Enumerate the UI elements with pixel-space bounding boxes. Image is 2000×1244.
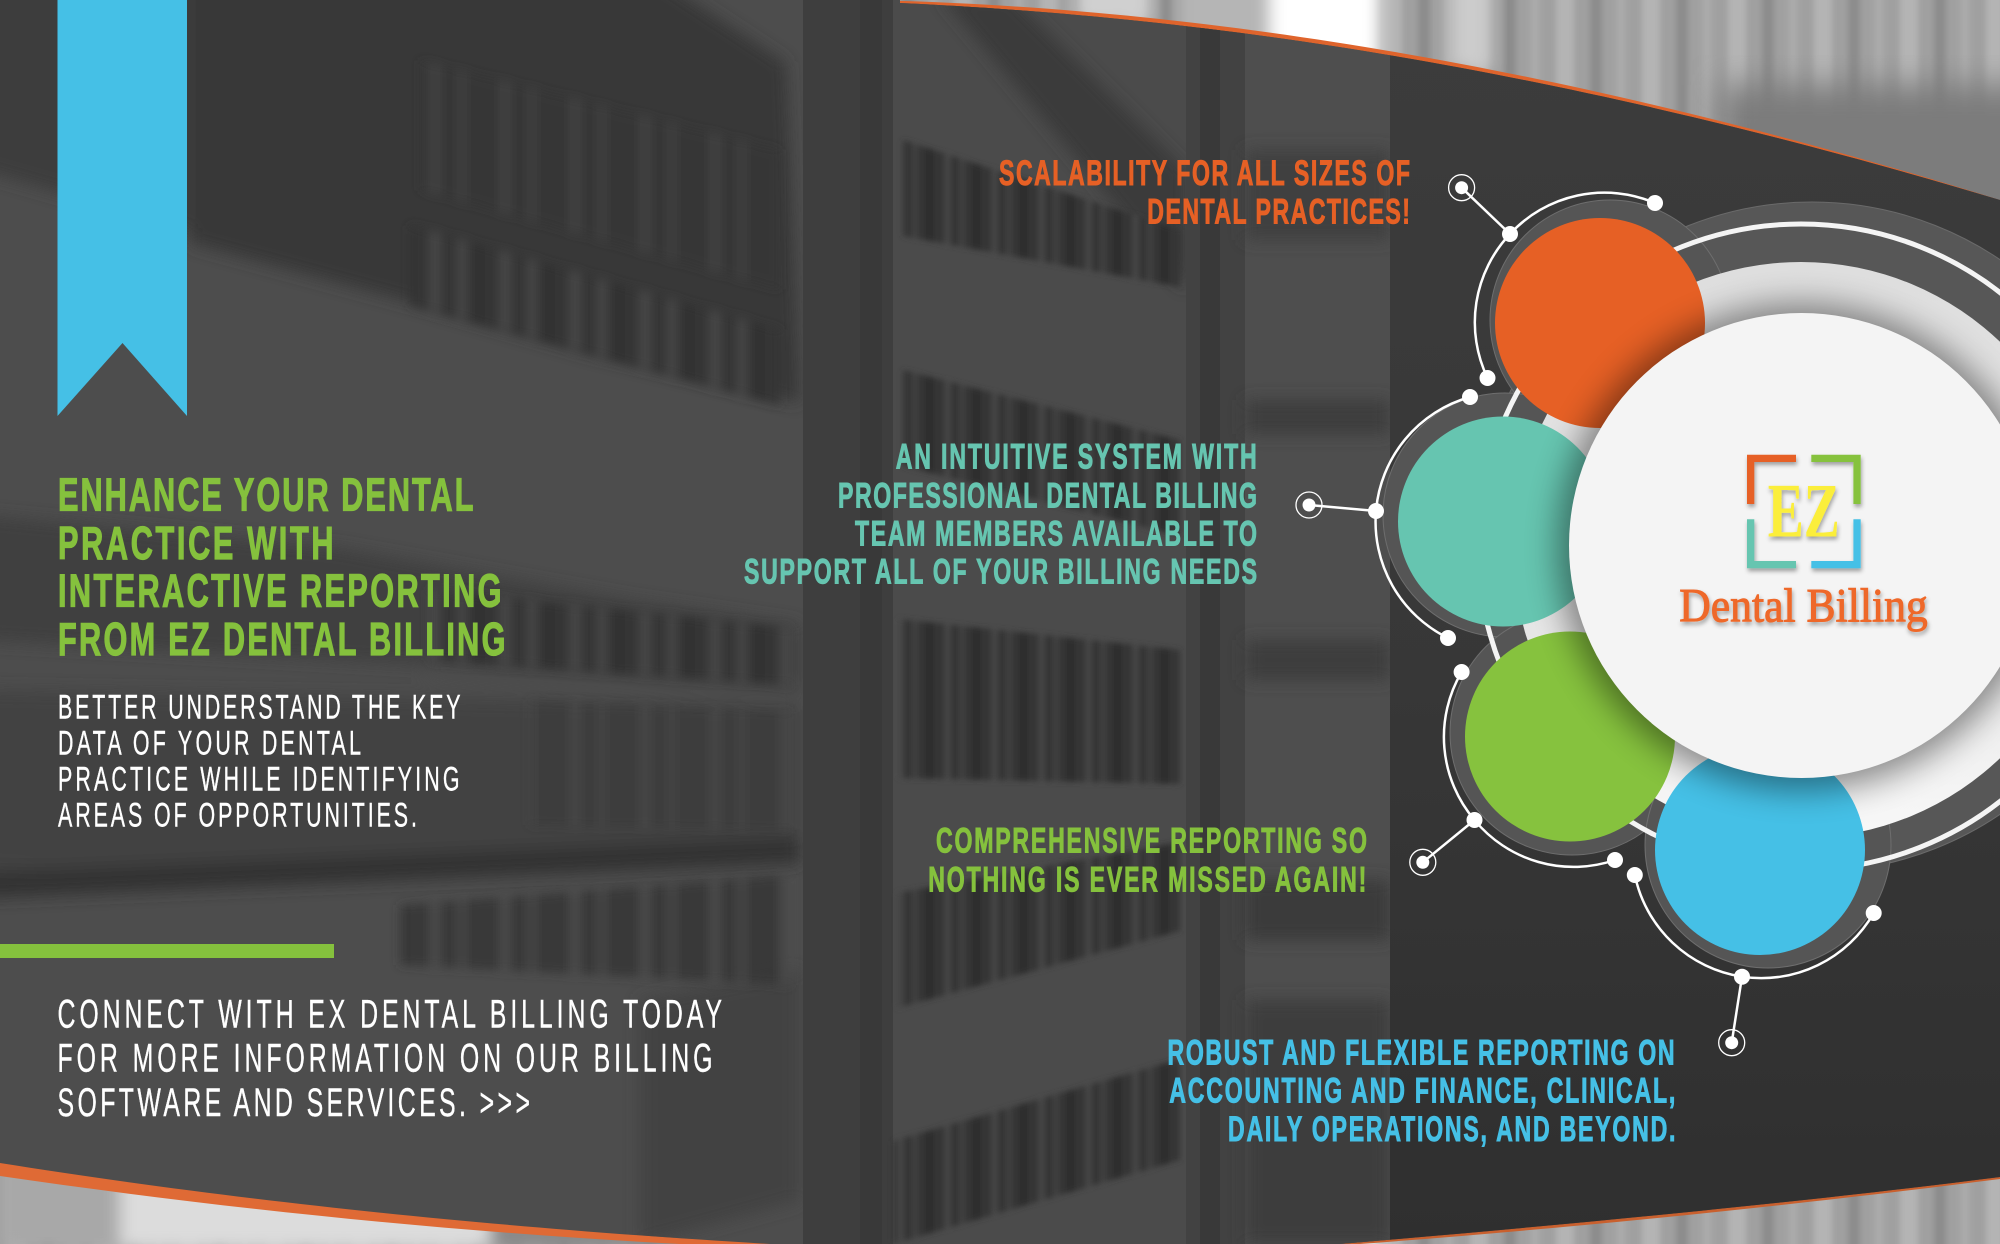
label: intuitive system: SUPPORT ALL OF YOUR BILLING NEEDS xyxy=(744,553,1257,592)
white ring line xyxy=(1478,224,2000,870)
label: intuitive system: PROFESSIONAL DENTAL BILLING xyxy=(838,477,1257,516)
background: orange bottom right sliver xyxy=(1300,1175,2000,1244)
label: robust reporting: ACCOUNTING AND FINANCE, CLINICAL, xyxy=(1169,1072,1675,1111)
background: orange top curve xyxy=(870,0,2000,204)
circle: green xyxy=(1465,632,1675,842)
intro text block: DATA OF YOUR DENTAL xyxy=(58,725,361,763)
circle: blue xyxy=(1655,745,1865,955)
outer dark ring xyxy=(1477,202,2000,872)
logo xyxy=(1679,455,1928,633)
heading: FROM EZ DENTAL BILLING xyxy=(58,614,505,666)
connector: teal xyxy=(1296,389,1478,646)
call to action text xyxy=(58,991,722,1124)
logo brackets xyxy=(1747,455,1861,568)
diagram: circles xyxy=(1383,200,2000,968)
heading: ENHANCE YOUR DENTAL xyxy=(58,469,473,521)
call to action text: CONNECT WITH EX DENTAL BILLING TODAY xyxy=(58,991,722,1036)
label: scalability: DENTAL PRACTICES! xyxy=(1147,193,1410,232)
label: comprehensive reporting xyxy=(928,822,1367,900)
ribbon bookmark xyxy=(58,0,187,416)
small ring: teal xyxy=(1383,393,1627,637)
label: robust reporting: ROBUST AND FLEXIBLE REPORTING ON xyxy=(1168,1034,1675,1073)
middle column diagonal shade xyxy=(950,6,1186,274)
label: intuitive system: AN INTUITIVE SYSTEM WITH xyxy=(896,438,1257,477)
white central circle xyxy=(1569,313,2000,778)
circle: teal xyxy=(1398,416,1608,626)
intro text block xyxy=(58,688,461,835)
label: scalability xyxy=(999,154,1410,232)
light grey ring xyxy=(1513,262,2000,838)
connector: green xyxy=(1410,664,1623,875)
label: comprehensive reporting: COMPREHENSIVE REPORTING SO xyxy=(936,822,1367,861)
logo wordmark: Dental Billing xyxy=(1679,580,1928,633)
label: scalability: SCALABILITY FOR ALL SIZES OF xyxy=(999,154,1410,193)
small ring: green xyxy=(1450,611,1694,855)
call to action text: SOFTWARE AND SERVICES. >>> xyxy=(58,1080,530,1124)
green divider bar xyxy=(0,944,334,958)
intro text block: PRACTICE WHILE IDENTIFYING xyxy=(58,761,459,799)
label: intuitive system: TEAM MEMBERS AVAILABLE TO xyxy=(855,515,1257,554)
small ring: blue xyxy=(1645,722,1891,968)
left shelf tab bands xyxy=(398,234,782,983)
call to action text: FOR MORE INFORMATION ON OUR BILLING xyxy=(58,1036,713,1080)
intro text block: BETTER UNDERSTAND THE KEY xyxy=(58,688,461,727)
logo EZ letters: EZ xyxy=(1768,468,1840,554)
intro text block: AREAS OF OPPORTUNITIES. xyxy=(58,797,417,835)
connector: blue xyxy=(1627,867,1882,1056)
background: orange bottom curve xyxy=(0,1160,800,1244)
label: comprehensive reporting: NOTHING IS EVER MISSED AGAIN! xyxy=(928,861,1366,900)
connector: orange xyxy=(1449,175,1663,386)
label: robust reporting: DAILY OPERATIONS, AND BEYOND. xyxy=(1228,1110,1675,1149)
heading xyxy=(58,469,505,666)
label: intuitive system xyxy=(744,438,1257,592)
heading: PRACTICE WITH xyxy=(58,518,333,570)
small ring: orange xyxy=(1490,200,1730,440)
label: robust reporting xyxy=(1168,1034,1675,1149)
heading: INTERACTIVE REPORTING xyxy=(58,565,502,617)
white circle shadow xyxy=(1557,303,2000,791)
circle: orange xyxy=(1495,218,1705,428)
